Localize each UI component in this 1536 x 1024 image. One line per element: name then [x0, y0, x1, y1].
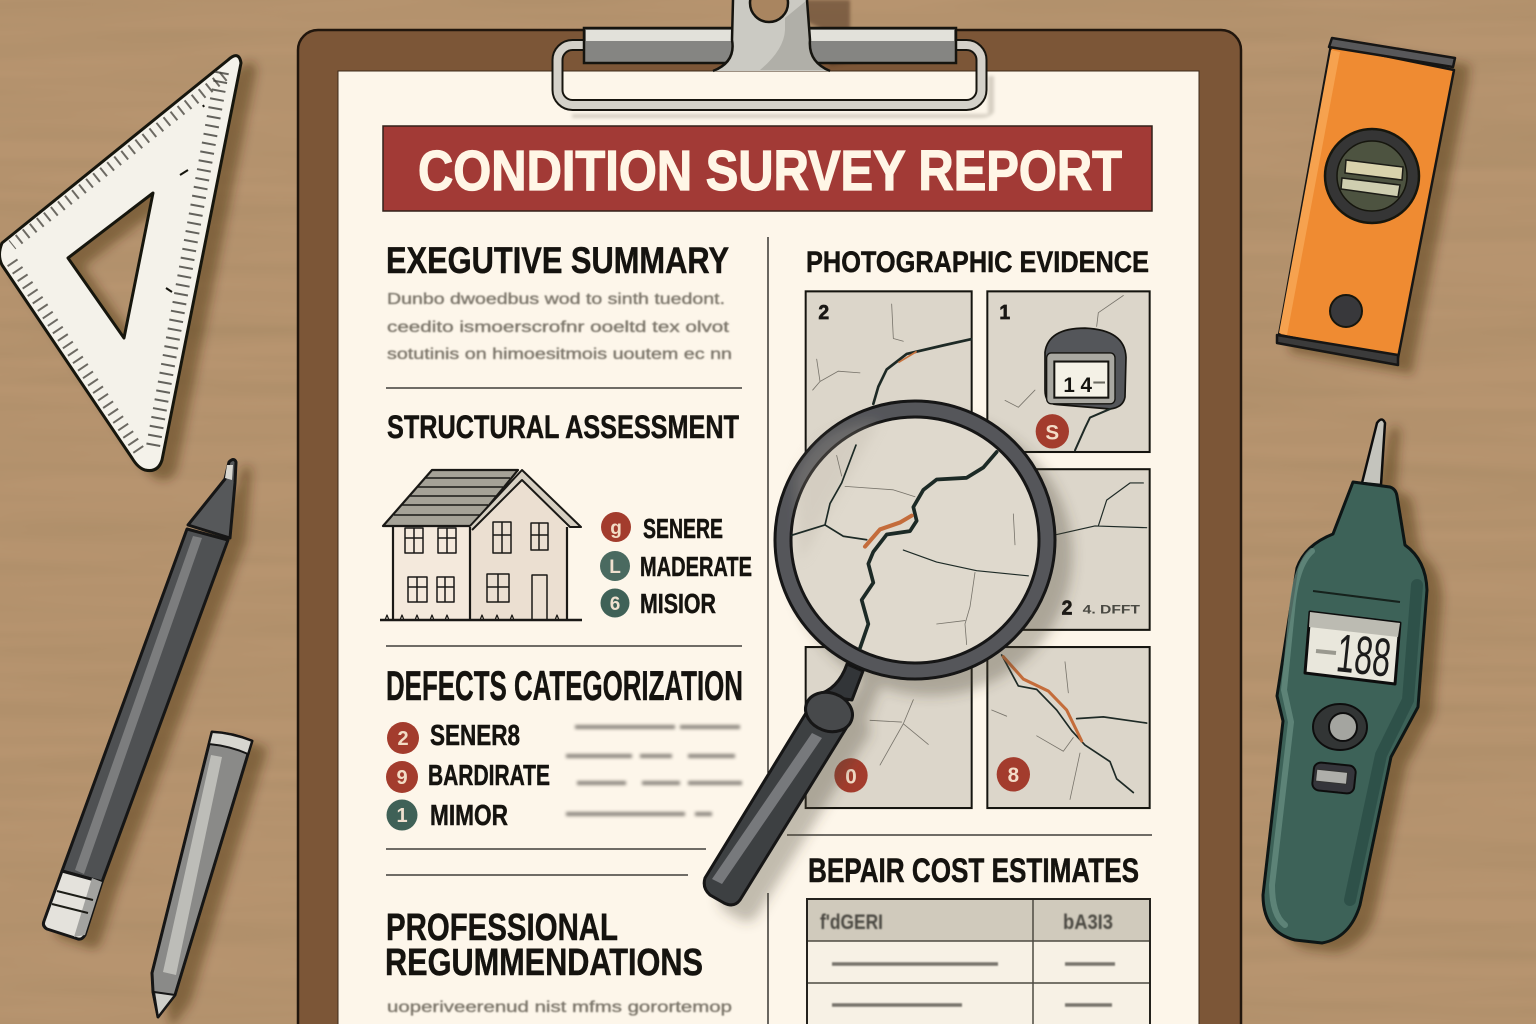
- section: defects categorization: 1: [396, 805, 408, 827]
- photo 2 with gauge: 1: [999, 302, 1010, 324]
- meter display: [1305, 612, 1400, 689]
- meter display: 188: [1334, 623, 1394, 689]
- photo 5: [987, 647, 1150, 808]
- magnifying glass: [704, 409, 1047, 905]
- cost table: [807, 899, 1150, 1024]
- severity legend: MADERATE: [640, 551, 752, 582]
- triangle ruler: [0, 56, 241, 471]
- house illustration: [380, 470, 582, 620]
- severity legend: MISIOR: [640, 588, 716, 619]
- section: defects categorization: MIMOR: [430, 800, 508, 832]
- section: professional recommendations: PROFESSIONAL: [386, 907, 618, 949]
- clipboard board: [298, 30, 1241, 1024]
- title banner: [383, 126, 1152, 211]
- photo 4: [806, 647, 972, 808]
- magnifier handle: [704, 664, 863, 905]
- photo 3: 2: [1062, 597, 1072, 619]
- title banner: CONDITION SURVEY REPORT: [418, 139, 1122, 203]
- meter switch: [1312, 762, 1356, 794]
- section: professional recommendations: [385, 907, 732, 1016]
- photo panels: [806, 291, 1150, 808]
- photo 3: 4. DFFT: [1083, 605, 1140, 617]
- section: structural assessment: STRUCTURAL ASSESSMENT: [387, 409, 739, 445]
- lens cracks: [792, 445, 1028, 648]
- clipboard clip: [558, 0, 994, 118]
- section: structural assessment: [380, 409, 752, 620]
- section: professional recommendations: uoperiveerenud nist mfms gorortemop: [387, 999, 732, 1016]
- photo 3: [987, 469, 1150, 630]
- level vial: [1325, 129, 1419, 223]
- section: defects categorization: DEFECTS CATEGORIZATION: [386, 662, 743, 709]
- section: executive summary: sotutinis on himoesitmois uoutem ec nn: [387, 346, 732, 363]
- section: repair cost estimates: [807, 852, 1150, 1024]
- photo 2 with gauge: [987, 291, 1150, 452]
- photo 2 with gauge: 1 4: [1063, 374, 1092, 397]
- section: photographic evidence: [806, 246, 1150, 808]
- section: executive summary: Dunbo dwoedbus wod to sinth tuedont.: [387, 291, 725, 308]
- section: defects categorization: SENER8: [430, 720, 520, 752]
- orange spirit level: [1277, 38, 1455, 365]
- cost table: bA3I3: [1063, 911, 1113, 934]
- photo 1: [806, 291, 972, 456]
- pencil: [43, 460, 236, 939]
- cost table: f'dGERI: [820, 911, 883, 934]
- section: defects categorization: BARDIRATE: [428, 760, 550, 792]
- section: executive summary: EXEGUTIVE SUMMARY: [386, 240, 729, 281]
- severity legend: SENERE: [643, 513, 723, 544]
- section: defects categorization: 9: [396, 767, 408, 789]
- photo 4: 0: [845, 765, 857, 788]
- section: executive summary: [386, 240, 732, 363]
- photo 5: 8: [1008, 764, 1019, 787]
- photo 2 with gauge: S: [1045, 421, 1059, 444]
- paper sheet: [338, 71, 1199, 1024]
- section: executive summary: ceedito ismoerscrofnr ooeltd tex olvot: [387, 319, 730, 336]
- severity legend: g: [610, 518, 622, 539]
- grey marker pen: [152, 732, 252, 1017]
- section: professional recommendations: REGUMMENDATIONS: [385, 942, 703, 984]
- blurred description lines: [566, 727, 742, 814]
- meter dial: [1313, 704, 1367, 750]
- section: repair cost estimates: BEPAIR COST ESTIMATES: [808, 852, 1139, 890]
- lens and ring: [783, 409, 1047, 671]
- section: defects categorization: 2: [397, 728, 409, 750]
- section: defects categorization: [386, 662, 743, 832]
- severity legend: [600, 512, 752, 619]
- section: photographic evidence: PHOTOGRAPHIC EVIDENCE: [806, 246, 1149, 279]
- moisture meter: [1263, 420, 1427, 943]
- severity legend: 6: [610, 594, 620, 615]
- severity legend: L: [609, 557, 621, 578]
- photo 1: 2: [818, 302, 829, 324]
